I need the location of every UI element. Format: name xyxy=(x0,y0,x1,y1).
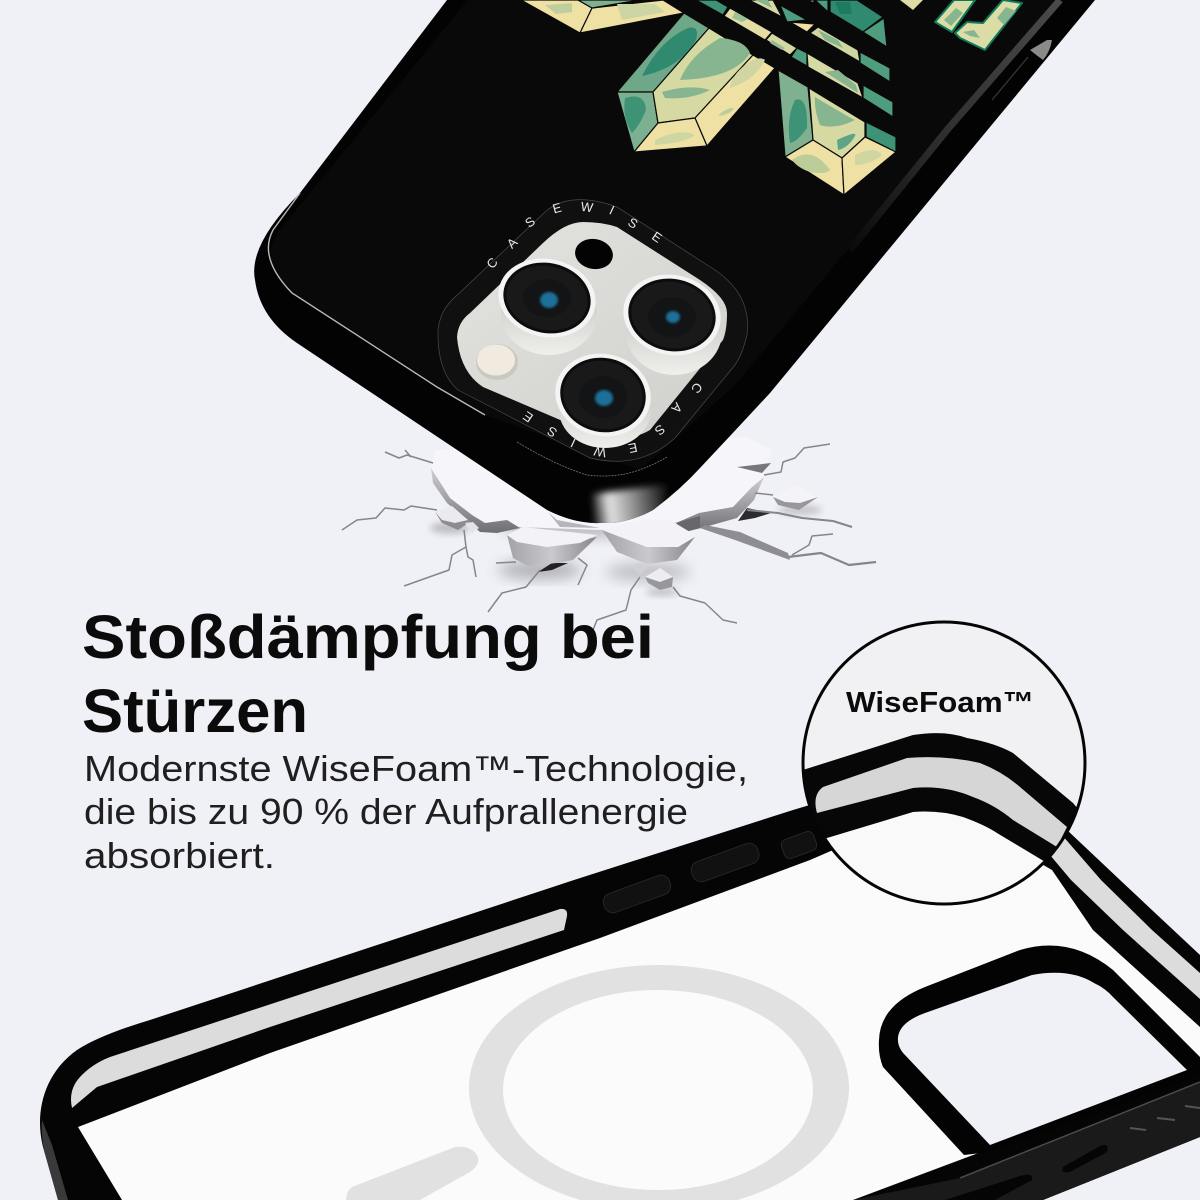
body text: Modernste WiseFoam™-Technologie, xyxy=(84,748,748,789)
camera cutout frame xyxy=(879,946,1200,1155)
ring lettering: E xyxy=(551,200,563,216)
ring lettering: E xyxy=(520,408,536,426)
ring lettering: E xyxy=(627,440,639,456)
side buttons top rim xyxy=(601,830,818,915)
crystal band top xyxy=(808,0,887,47)
ring lettering: A xyxy=(504,234,521,251)
crystal band middle xyxy=(749,0,890,82)
interior clear back xyxy=(78,840,1200,1200)
side recess line xyxy=(992,57,1028,100)
lower rim highlight line xyxy=(960,1082,1200,1178)
lower rim lighter section xyxy=(853,1082,1200,1200)
magnifier outline xyxy=(803,622,1085,904)
corner highlight xyxy=(589,482,668,524)
rim black xyxy=(40,790,1200,1200)
body text: die bis zu 90 % der Aufprallenergie xyxy=(84,791,688,832)
ring lettering: C xyxy=(688,380,706,396)
side bumper edge xyxy=(850,0,1060,250)
crystal band lower xyxy=(696,0,893,117)
crystal lower left xyxy=(617,13,775,152)
small rock right xyxy=(773,485,818,510)
ring lettering: I xyxy=(568,435,578,451)
magnifier disc xyxy=(803,622,1085,904)
foam strip right xyxy=(1050,835,1200,999)
alignment pill xyxy=(346,1147,478,1200)
bumper stitching line xyxy=(517,442,667,476)
ring lettering: E xyxy=(649,228,665,246)
foam strip left xyxy=(71,909,567,1108)
camera plate xyxy=(457,222,727,438)
callout: WiseFoam magnifier xyxy=(802,620,1086,906)
ring lettering: S xyxy=(625,214,641,232)
lens 1 xyxy=(491,250,603,355)
heading xyxy=(82,603,654,745)
case back panel xyxy=(271,0,1055,470)
block center left xyxy=(507,527,597,566)
microphone hole xyxy=(573,236,615,272)
heading: Stürzen xyxy=(82,677,308,745)
case body xyxy=(254,0,1095,523)
raised plateau xyxy=(431,437,771,530)
heading: Stoßdämpfung bei xyxy=(82,603,654,671)
magnified rim detail xyxy=(804,733,1076,861)
ring lettering: A xyxy=(668,400,685,416)
flash xyxy=(476,344,518,380)
block center right xyxy=(602,519,695,564)
crystal lower right xyxy=(778,70,896,195)
ring lettering: S xyxy=(522,213,538,231)
body text xyxy=(84,748,748,876)
ring lettering: I xyxy=(607,202,617,218)
ring lettering: C xyxy=(483,255,501,272)
lens 3 xyxy=(548,345,658,448)
rim hatch marks xyxy=(1130,1106,1200,1130)
rim left reflection xyxy=(42,1120,68,1200)
small rock left xyxy=(435,506,479,533)
camera ring xyxy=(438,200,748,461)
panel: phone with black case, back view xyxy=(254,0,1095,532)
crystal top left xyxy=(521,0,684,33)
lettering fragments xyxy=(900,0,1022,50)
bottom rim buttons xyxy=(945,1145,1108,1200)
fine cracks xyxy=(342,444,876,630)
side button xyxy=(1030,40,1052,60)
ring lettering: S xyxy=(544,423,560,441)
camera module xyxy=(438,199,748,461)
lens 2 xyxy=(616,266,728,375)
callout label: WiseFoam™ xyxy=(846,687,1034,719)
ring lettering: W xyxy=(580,199,595,215)
ring lettering xyxy=(483,199,706,460)
artwork: crystal logo xyxy=(521,0,1022,195)
ring lettering: W xyxy=(592,443,607,460)
case highlight line xyxy=(268,193,485,415)
cliff edges xyxy=(431,463,771,572)
small rocks bottom xyxy=(631,563,673,590)
illustration: cracked ground impact xyxy=(342,437,876,630)
tapered main crack xyxy=(700,525,790,560)
panel: clear case inside view xyxy=(40,790,1200,1200)
magnetic ring xyxy=(469,965,849,1200)
body text: absorbiert. xyxy=(84,835,275,876)
ring lettering: S xyxy=(652,421,668,439)
shadow under impact xyxy=(430,505,822,596)
